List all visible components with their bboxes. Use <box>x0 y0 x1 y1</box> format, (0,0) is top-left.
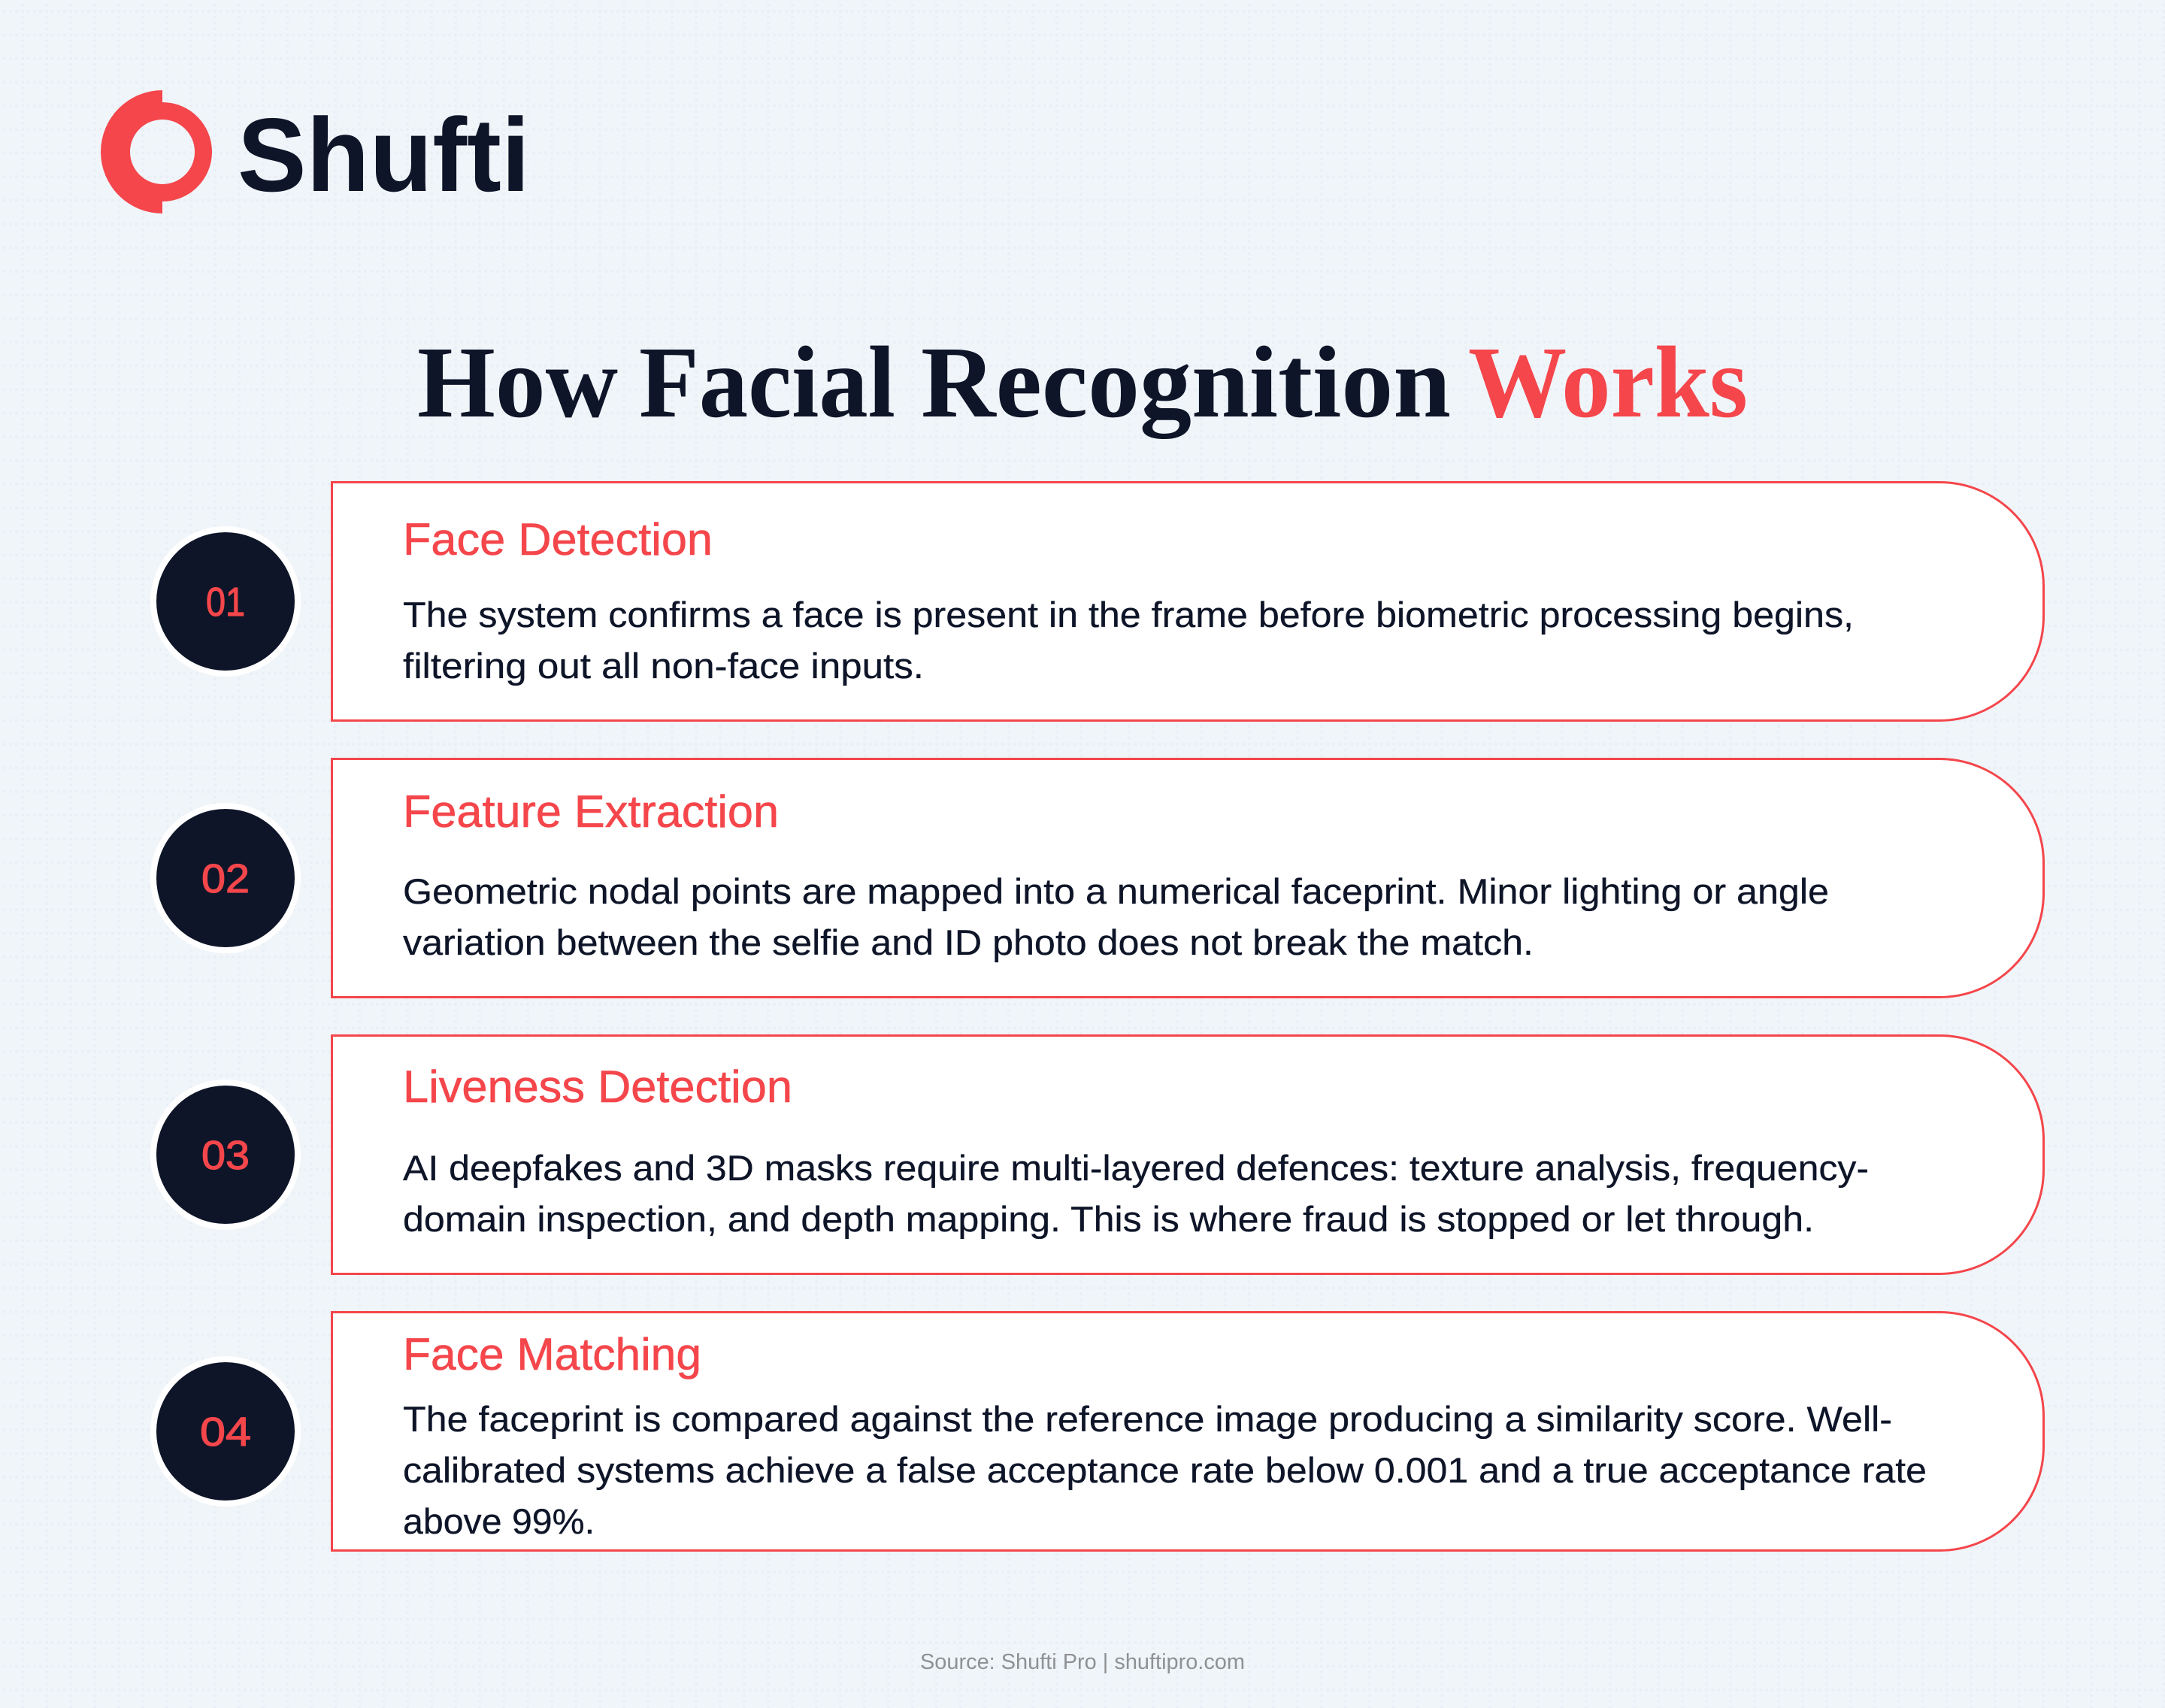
icon: red ring mark <box>101 90 212 214</box>
title <box>417 326 1748 439</box>
step 02: Feature Extraction <box>150 759 2043 997</box>
number badge 01: 01 <box>206 580 245 625</box>
logo wordmark: Shufti <box>238 97 530 214</box>
text block: Liveness Detection description <box>403 1148 1869 1239</box>
text block: Liveness Detection description: AI deepfakes and 3D masks require multi-layered defences: texture analysis, frequency- <box>403 1148 1869 1188</box>
number badge 02 <box>150 803 301 953</box>
title: Facial <box>639 326 895 439</box>
panel: Face Matching card <box>332 1313 2043 1550</box>
text block: Feature Extraction description <box>403 871 1829 962</box>
number badge 04 <box>150 1356 301 1507</box>
text block: Face Detection description: filtering out all non-face inputs. <box>403 646 924 686</box>
heading: Feature Extraction: Feature Extraction <box>403 786 779 837</box>
number badge 02: 02 <box>201 856 250 901</box>
panel: Liveness Detection card <box>332 1036 2043 1273</box>
logo: Shufti <box>101 90 530 214</box>
text block: Face Matching description <box>403 1399 1927 1541</box>
number badge 03 <box>150 1080 301 1230</box>
text block: Face Detection description <box>403 595 1854 686</box>
text block: Face Matching description: The faceprint is compared against the reference image producing a similarity score. Well- <box>403 1399 1892 1439</box>
step 03: Liveness Detection <box>150 1036 2043 1273</box>
number badge 03: 03 <box>201 1133 250 1178</box>
panel: Feature Extraction card <box>332 759 2043 997</box>
heading: Face Detection: Face Detection <box>403 514 713 565</box>
source footer: Source: Shufti Pro | shuftipro.com <box>920 1650 1245 1674</box>
step 04: Face Matching <box>150 1313 2043 1550</box>
text block: Feature Extraction description: Geometric nodal points are mapped into a numerical faceprint. Minor lighting or angle <box>403 871 1829 911</box>
title: How <box>417 326 618 439</box>
heading: Liveness Detection: Liveness Detection <box>403 1061 792 1112</box>
number badge 04: 04 <box>200 1410 251 1455</box>
panel: Face Detection card <box>332 483 2043 720</box>
text block: Face Matching description: above 99%. <box>403 1501 595 1541</box>
heading: Face Matching: Face Matching <box>403 1329 701 1379</box>
step 01: Face Detection <box>150 483 2043 720</box>
text block: Feature Extraction description: variation between the selfie and ID photo does not break the match. <box>403 922 1534 962</box>
title: Works <box>1468 326 1748 439</box>
text block: Face Detection description: The system confirms a face is present in the frame before biometric processing begins, <box>403 595 1854 634</box>
title: Recognition <box>921 326 1451 439</box>
text block: Face Matching description: calibrated systems achieve a false acceptance rate below 0.001 and a true acceptance rate <box>403 1450 1927 1490</box>
text block: Liveness Detection description: domain inspection, and depth mapping. This is where fraud is stopped or let through. <box>403 1199 1814 1239</box>
number badge 01 <box>150 526 301 677</box>
